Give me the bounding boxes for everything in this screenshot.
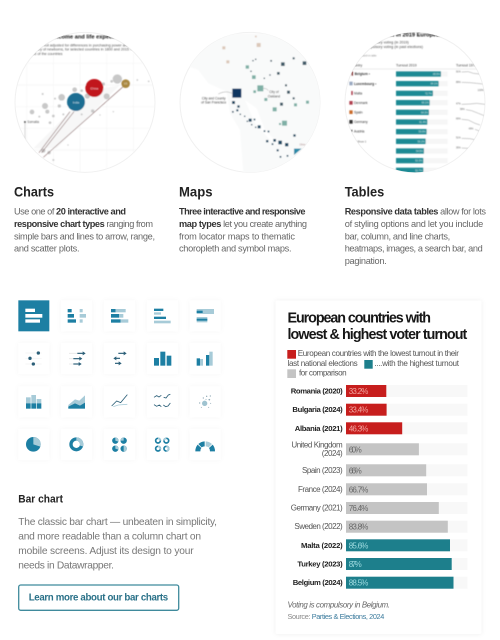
row: Bulgaria: Bulgaria (2024) [292, 405, 343, 414]
row: Spain: 66% [349, 466, 362, 475]
panel: chart type icon grid [18, 300, 221, 460]
panel: tables data table preview circle: 72.7% [425, 92, 433, 95]
panel: tables data table preview circle: 66.1% [422, 102, 429, 105]
row: Sweden [294, 521, 448, 533]
text block: Maps description: Three interactive and responsive [179, 206, 306, 216]
text block: Charts description: responsive chart types ranging from [14, 219, 153, 229]
row: Turkey: 87% [349, 560, 362, 569]
panel: tables data table preview circle: 53.3% [415, 160, 423, 163]
panel: tables data table preview circle: 49% [469, 129, 473, 131]
row: France: 66.7% [349, 485, 368, 494]
icon: stacked columns [18, 386, 49, 417]
panel: tables data table preview circle: 51% [456, 138, 461, 140]
icon: scatter plot [190, 386, 221, 417]
row: Turkey: Turkey (2023) [297, 560, 343, 568]
text block: Maps description: map types let you create anything [179, 219, 307, 229]
chart source: Source: Parties & Elections, 2024 [288, 612, 384, 621]
button: learn more: Learn more about our bar charts [29, 593, 168, 604]
icon: election donut [190, 429, 221, 460]
legend: European countries with the lowest turnout in their [298, 349, 459, 358]
text block: Maps description: from locator maps to thematic [179, 231, 295, 241]
row: France: France (2024) [298, 485, 343, 494]
legend: for comparison [299, 368, 347, 378]
icon: bar chart selected [18, 300, 49, 331]
bar row tracks [346, 385, 468, 589]
panel: tables data table preview circle: 85.5% [433, 73, 441, 76]
panel: charts scatter preview circle: China [90, 86, 99, 90]
row: United Kingdom: United Kingdom [291, 440, 343, 450]
chart note: Voting is compulsory in Belgium. [288, 601, 390, 610]
text block: Tables description: Responsive data tables allow for lots [345, 206, 486, 216]
text block: Charts description: simple bars and lines to arrow, range, [14, 231, 155, 241]
legend: last national elections [288, 359, 358, 368]
icon: arrow plot [61, 343, 92, 374]
panel: tables data table preview circle: Compulsory voting (in past elections) [363, 45, 423, 49]
panel: tables data table preview circle: 59.8% [419, 131, 426, 134]
row: United Kingdom: (2024) [322, 449, 343, 458]
row: France [298, 483, 427, 495]
panel: example bar chart card [276, 300, 482, 634]
panel: charts scatter preview circle: Somalia [27, 120, 39, 124]
panel: tables data table preview circle: 66% [456, 119, 461, 121]
panel: tables data table preview circle: Compulsory voting (in 2019) [363, 41, 409, 45]
icon: multiple pies [104, 429, 135, 460]
text block: Bar chart description [18, 517, 217, 571]
panel: tables data table preview circle: 54.5% [416, 150, 424, 153]
panel: maps symbol map preview circle: Oakland [268, 94, 280, 98]
panel: tables data table preview circle: Search in table [360, 54, 377, 57]
panel: tables data table preview circle: 91% [456, 72, 461, 74]
text block: Bar chart description: mobile screens. Adjust its design to your [18, 546, 194, 557]
row: Albania: Albania (2021) [295, 424, 343, 433]
panel: tables data table preview circle: 61.4% [419, 121, 427, 124]
row: Bulgaria [292, 404, 387, 416]
row: Belgium: 88.5% [349, 579, 368, 588]
panel: tables data table preview circle: Turnout 2019 [396, 64, 417, 68]
panel: tables data table preview circle: 52.7% [415, 169, 423, 172]
icon: grouped bars [147, 300, 178, 331]
panel: tables data table preview circle: 35% [456, 147, 461, 149]
row: Spain: Spain (2023) [302, 466, 343, 475]
panel: maps symbol map preview circle: Ohlo [299, 142, 306, 146]
icon: area chart [61, 386, 92, 417]
chart title: European countries with [288, 311, 431, 327]
panel: tables data table preview circle: Austria [354, 130, 365, 134]
icon: dot plot [18, 343, 49, 374]
text block: Charts description: and scatter plots. [14, 244, 80, 254]
row: United Kingdom: 60% [349, 445, 362, 454]
panel: tables data table preview circle: Luxembourg ▪ [354, 82, 376, 86]
icon: grouped columns [190, 343, 221, 374]
panel: tables data table preview circle: Turnout 1979 [456, 64, 477, 68]
icon: column chart [147, 343, 178, 374]
row: Albania [295, 422, 402, 434]
heading: Charts: Charts [14, 184, 54, 200]
legend: ....with the highest turnout [374, 359, 460, 368]
heading: Bar chart: Bar chart [18, 494, 63, 506]
panel: tables data table preview circle: 47% [456, 104, 461, 106]
icon: bullet bars [190, 300, 221, 331]
row: Turkey [297, 558, 452, 570]
panel: charts scatter preview circle: income, not adjusted for differences in purchasing power and [30, 43, 129, 47]
panel: charts scatter preview circle: Income and life expectancy now [53, 35, 140, 41]
row: Romania [291, 385, 386, 397]
icon: stacked bars [104, 300, 135, 331]
panel: tables data table preview circle: 64.3% [421, 111, 429, 114]
panel: charts scatter preview circle: US [124, 84, 128, 86]
panel: maps symbol map preview circle: of San Francisco [201, 101, 226, 105]
row: Belgium: Belgium (2024) [293, 578, 343, 587]
row: Romania: 33.2% [349, 387, 368, 396]
text block: Tables description: of styling options and let you include [345, 219, 483, 229]
row: Spain [302, 464, 426, 476]
panel: tables data table preview circle: Germany [354, 120, 368, 124]
San Francisco marker [232, 89, 241, 98]
row: Sweden: Sweden (2022) [294, 522, 343, 531]
button: learn more [19, 585, 179, 610]
text block: Maps description [179, 206, 307, 254]
chart title: lowest & highest voter turnout [288, 327, 468, 343]
row: Albania: 46.3% [349, 424, 368, 433]
row: Germany [291, 502, 439, 514]
row: Sweden: 83.8% [349, 523, 368, 532]
panel: tables data table preview circle: 88% [456, 82, 461, 84]
text block: Tables description [345, 206, 486, 266]
text block: Bar chart description: and more readable than a column chart on [18, 532, 201, 542]
row: Germany: 76.4% [349, 504, 368, 513]
table rows [396, 71, 448, 173]
panel: charts scatter preview circle: country of newborns, for selected countries in 1800 and 2015 — [30, 48, 134, 52]
panel: tables data table preview circle: Spain [354, 110, 363, 114]
row: Bulgaria: 33.4% [349, 406, 368, 415]
row: Romania: Romania (2020) [291, 386, 343, 396]
icon: range arrows [104, 343, 135, 374]
heading: Maps: Maps [179, 184, 213, 200]
row: United Kingdom [291, 440, 419, 458]
text block: Tables description: pagination. [345, 256, 387, 266]
panel: tables data table preview circle: 100% [478, 90, 484, 92]
icon: pie chart [18, 429, 49, 460]
icon: multiple donuts [147, 429, 178, 460]
panel: charts scatter preview circle [13, 32, 157, 173]
text block: Charts description [14, 206, 155, 254]
text block: Bar chart description: The classic bar chart — unbeaten in simplicity, [18, 517, 217, 528]
text block: Tables description: bar, column, and line charts, [345, 231, 450, 241]
row: Malta: Malta (2022) [301, 541, 343, 550]
icon: line chart [104, 386, 135, 417]
panel: tables data table preview circle: 58% [460, 109, 465, 111]
panel: tables data table preview circle: Malta [354, 91, 362, 95]
row: Malta [301, 539, 450, 551]
chart title [288, 311, 468, 343]
panel: tables data table preview circle: Country [350, 64, 362, 68]
panel: tables data table preview circle: Belgium ▪ [355, 72, 370, 76]
panel: tables data table preview circle: 84.1% [431, 83, 438, 86]
panel: tables data table preview circle: Denmark [354, 101, 368, 105]
text block: Tables description: heatmaps, images, a search bar, and [345, 244, 483, 254]
row: Germany: Germany (2021) [291, 504, 343, 512]
icon: split bars [61, 300, 92, 331]
row: Malta: 85.6% [349, 541, 368, 550]
panel: tables data table preview circle: Turnout in 2019 European elections [373, 32, 469, 38]
panel: tables data table preview circle [345, 32, 485, 173]
row: Belgium [293, 577, 454, 589]
icon: donut chart [61, 429, 92, 460]
icon: small multiple lines [147, 386, 178, 417]
text block: Bar chart description: needs in Datawrapper. [18, 560, 114, 571]
text block: Maps description: choropleth and symbol maps. [179, 244, 292, 254]
panel: charts scatter preview circle: size of the countries [30, 52, 63, 56]
heading: Tables: Tables [345, 184, 384, 200]
panel: maps symbol map preview circle [180, 32, 322, 173]
text block: Charts description: Use one of 20 interactive and [14, 206, 126, 216]
panel: maps symbol map preview circle: City of [269, 90, 279, 94]
panel: tables data table preview circle: Show 1 [357, 139, 367, 143]
panel: maps symbol map preview circle: City and County [202, 97, 226, 101]
panel: tables data table preview circle: 56.2% [418, 140, 425, 143]
panel: charts scatter preview circle: India [73, 100, 80, 104]
legend [287, 349, 460, 378]
